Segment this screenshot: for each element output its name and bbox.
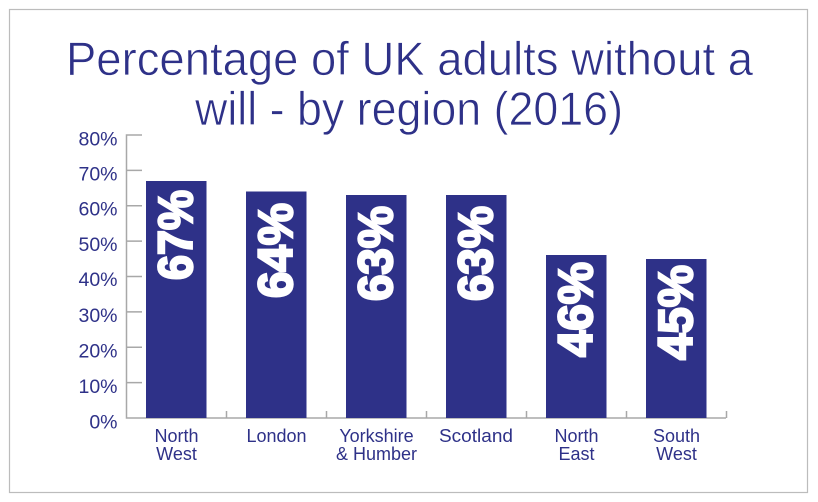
bar: South West 45%: 45% xyxy=(650,265,703,360)
y axis labels: 0% xyxy=(89,412,118,434)
bar: Scotland 63%: 63% xyxy=(450,206,503,301)
y axis labels: 70% xyxy=(78,164,118,186)
x axis labels: South xyxy=(653,426,700,446)
y axis labels: 10% xyxy=(78,376,118,398)
title: Percentage of UK adults without a xyxy=(66,32,754,85)
x axis labels: North xyxy=(554,426,599,446)
y axis labels: 40% xyxy=(78,269,118,291)
x axis labels xyxy=(154,426,700,464)
x axis labels: Scotland xyxy=(439,426,513,446)
bar: North West 67% xyxy=(146,181,206,418)
y axis labels xyxy=(78,128,118,434)
y axis labels: 60% xyxy=(78,198,118,220)
bar: North East 46% xyxy=(546,255,606,418)
x axis labels: London xyxy=(246,426,307,446)
bar: South West 45% xyxy=(646,259,706,418)
title xyxy=(66,32,754,135)
axes and tick marks xyxy=(126,135,726,418)
bar: North East 46%: 46% xyxy=(550,262,603,357)
x axis labels: Yorkshire xyxy=(339,426,414,446)
x axis labels: & Humber xyxy=(336,444,417,464)
x axis labels: West xyxy=(656,444,697,464)
x axis labels: East xyxy=(558,444,595,464)
bar: Yorkshire and Humber 63%: 63% xyxy=(350,206,403,301)
bar: London 64%: 64% xyxy=(250,203,303,298)
title: will - by region (2016) xyxy=(194,82,623,135)
y axis labels: 30% xyxy=(78,305,118,327)
y axis labels: 80% xyxy=(78,128,118,150)
bar: London 64% xyxy=(246,192,306,418)
bar: Yorkshire and Humber 63% xyxy=(346,195,406,418)
y axis labels: 50% xyxy=(78,234,118,256)
bar: Scotland 63% xyxy=(446,195,506,418)
bar: North West 67%: 67% xyxy=(150,190,203,280)
x axis labels: West xyxy=(156,444,197,464)
y axis labels: 20% xyxy=(78,340,118,362)
x axis labels: North xyxy=(154,426,199,446)
